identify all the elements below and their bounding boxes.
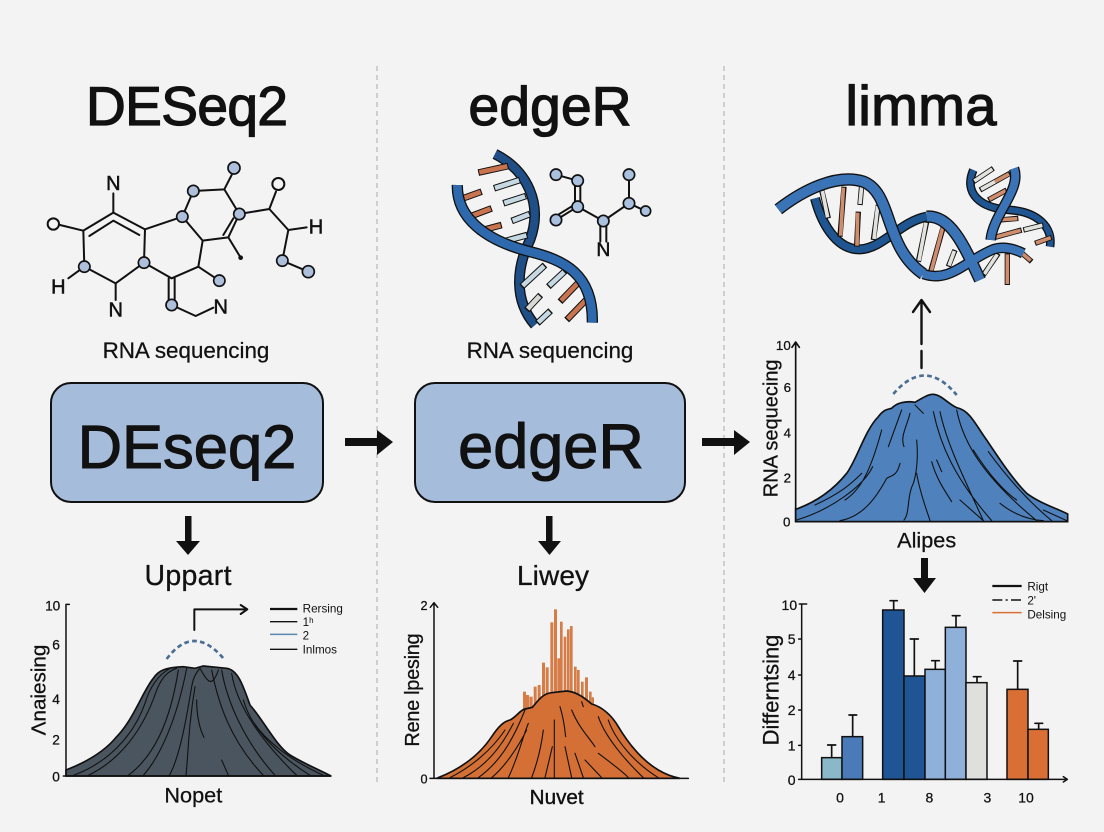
y ticks <box>776 338 792 530</box>
arrow: edgeR down <box>538 516 561 555</box>
y ticks: 0 <box>783 515 790 530</box>
y ticks <box>782 597 797 788</box>
y title: Λnaiesing <box>27 645 50 735</box>
y ticks: 0 <box>788 772 796 788</box>
orange spikes <box>523 609 594 712</box>
x ticks <box>836 789 1034 805</box>
legend <box>270 603 343 657</box>
icon: DESeq2 molecule: N <box>106 173 121 195</box>
legend: Rersing <box>303 603 343 616</box>
y axis <box>430 603 688 778</box>
y ticks: 6 <box>52 637 60 652</box>
y ticks: 10 <box>776 338 791 353</box>
y ticks: 2 <box>420 599 428 613</box>
legend: Rigt <box>1027 581 1049 594</box>
x ticks: 1 <box>878 789 886 805</box>
arrow: limma up dashed <box>913 300 930 368</box>
error bars <box>828 601 1043 758</box>
icon: edgeR small molecule: N <box>596 240 610 261</box>
axes <box>799 604 1067 782</box>
box: DEseq2 <box>51 383 323 502</box>
y ticks: 10 <box>45 599 61 614</box>
label: Liwey: Liwey <box>517 560 589 591</box>
icon: edgeR small molecule <box>550 169 651 261</box>
x title: Nopet <box>164 783 222 808</box>
legend: 2' <box>1027 595 1036 608</box>
bent arrow <box>194 605 247 630</box>
legend: 2 <box>303 629 309 642</box>
y title: Rene lpesing <box>402 633 424 747</box>
legend <box>992 581 1066 621</box>
legend: Inlmos <box>303 644 337 657</box>
box: edgeR: edgeR <box>458 412 644 482</box>
y ticks: 6 <box>784 380 791 395</box>
icon: DESeq2 molecule: N <box>108 300 123 322</box>
arrow: edgeR to limma chart <box>702 430 750 455</box>
icon: DESeq2 molecule: H <box>309 217 323 239</box>
x ticks: 0 <box>836 789 844 805</box>
y ticks: 10 <box>782 597 797 613</box>
y ticks: 2 <box>52 733 60 748</box>
mountain shape <box>796 394 1068 522</box>
x ticks: 10 <box>1018 789 1034 805</box>
title: DESeq2: DESeq2 <box>86 75 288 137</box>
icon: limma DNA helix <box>778 168 1052 285</box>
y ticks <box>45 599 61 784</box>
arrow: limma down <box>913 558 936 593</box>
mountain shape <box>437 691 680 778</box>
y ticks: 4 <box>784 425 792 440</box>
icon: DESeq2 molecule: N <box>213 296 228 318</box>
y ticks: 4 <box>788 667 796 683</box>
box: edgeR <box>415 383 685 502</box>
y ticks: 1 <box>788 737 796 753</box>
x title: Alipes <box>897 527 956 552</box>
chart: limma bar chart <box>759 581 1067 805</box>
y ticks: 0 <box>52 769 60 784</box>
chart: edgeR mountain <box>402 599 688 809</box>
x ticks: 8 <box>925 789 933 805</box>
legend: 1ʰ <box>303 616 314 629</box>
bars <box>822 610 1048 779</box>
chart: DESeq2 mountain <box>27 599 343 808</box>
icon: edgeR DNA helix <box>457 154 592 325</box>
y ticks: 5 <box>788 631 796 647</box>
box: DEseq2: DEseq2 <box>78 413 296 482</box>
y ticks: 0 <box>420 772 428 786</box>
y ticks: 2 <box>788 702 796 718</box>
dashed dome <box>167 641 223 659</box>
label: Uppart: Uppart <box>144 560 232 592</box>
x ticks: 3 <box>983 789 991 805</box>
title: limma: limma <box>846 74 997 137</box>
chart: limma mountain <box>760 338 1068 552</box>
y axis <box>63 604 331 776</box>
icon: DESeq2 molecule: H <box>51 276 66 298</box>
dashed dome <box>893 376 957 395</box>
icon: DESeq2 molecule <box>48 162 323 322</box>
x title: Nuvet <box>530 786 584 809</box>
caption: RNA sequencing (edgeR): RNA sequencing <box>467 338 633 363</box>
caption: RNA sequencing (DESeq2): RNA sequencing <box>103 338 269 363</box>
arrow: DEseq2 down <box>176 516 200 555</box>
y ticks <box>420 599 428 786</box>
y ticks: 4 <box>52 692 60 707</box>
arrow: DEseq2 to edgeR <box>345 430 393 455</box>
legend: Delsing <box>1027 608 1066 621</box>
y title: Differntsing <box>759 635 784 745</box>
y ticks: 2 <box>784 471 791 486</box>
y axis <box>792 342 1068 522</box>
title: edgeR: edgeR <box>468 75 632 137</box>
mountain shape <box>66 666 331 776</box>
y title: RNA sequecing <box>760 359 782 497</box>
